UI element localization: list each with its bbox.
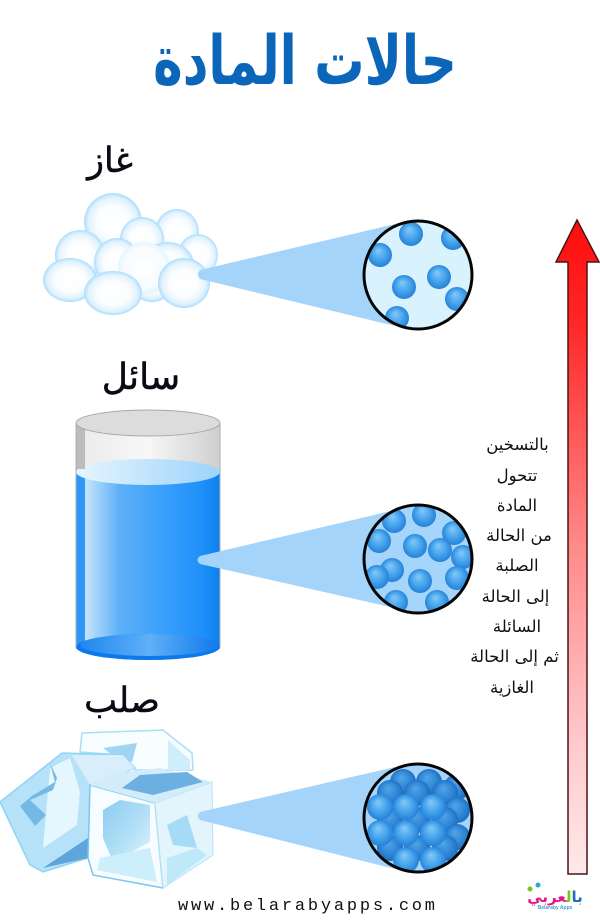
heading: solid: صلب (84, 681, 160, 721)
logo: بالعربي (527, 888, 583, 906)
title: حالات المادة (153, 23, 457, 101)
icon: glass of water (76, 410, 220, 660)
zoom cone: liquid (198, 510, 395, 608)
text block: heating explanation: الصلبة (495, 556, 539, 575)
back cube (80, 730, 193, 770)
magnified circle: liquid particles (364, 503, 475, 614)
arrow: heating direction (556, 220, 599, 874)
front cube (88, 768, 213, 888)
text block: heating explanation: السائلة (493, 617, 541, 636)
text block: heating explanation: المادة (497, 496, 537, 515)
text block: heating explanation: بالتسخين (486, 435, 549, 454)
heading: gas: غاز (85, 141, 133, 181)
text block: heating explanation: الغازية (490, 678, 534, 698)
text block: heating explanation: ثم إلى الحالة (470, 647, 559, 666)
zoom cone: solid (198, 767, 395, 869)
text block: heating explanation: من الحالة (486, 526, 552, 545)
text block: heating explanation (470, 435, 559, 698)
website url: www.belarabyapps.com (178, 897, 435, 916)
logo (527, 882, 583, 911)
left cube (0, 753, 135, 872)
magnified circle: solid particles (364, 764, 472, 873)
logo: Belaraby Apps (538, 905, 573, 911)
text block: heating explanation: إلى الحالة (482, 587, 549, 606)
icon: cloud (43, 193, 218, 315)
heading: liquid: سائل (102, 357, 180, 398)
text block: heating explanation: تتحول (497, 466, 538, 486)
zoom cone: gas (198, 224, 395, 326)
icon: ice cubes (0, 730, 213, 888)
magnified circle: gas particles (364, 221, 472, 330)
